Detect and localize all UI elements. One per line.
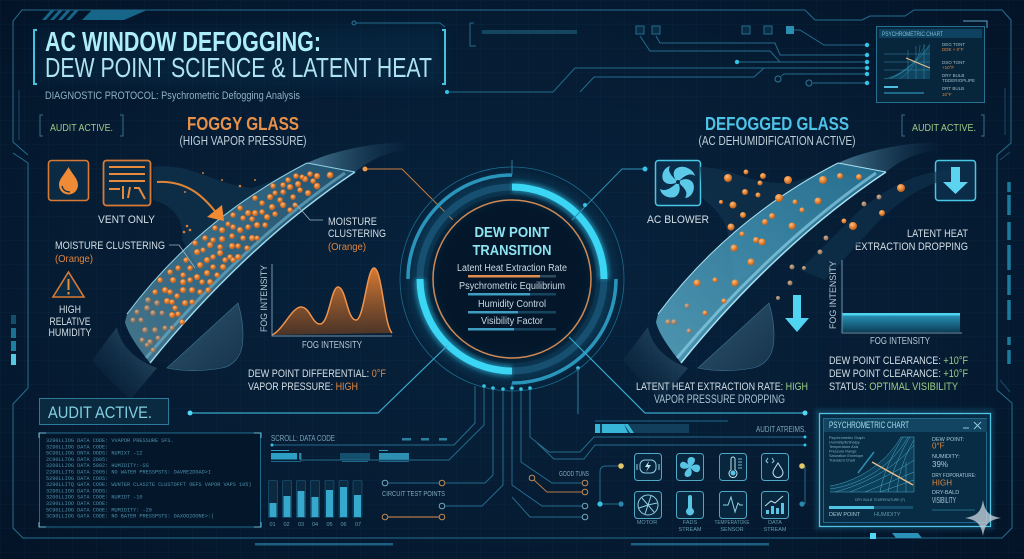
chart values: DRY-BALD — [932, 490, 959, 496]
readout: latent heat rate: VAPOR PRESSURE DROPPING — [654, 394, 785, 406]
mini psychrometric chart panel: DDE + 0°F — [942, 47, 964, 52]
icon: warning triangle — [53, 272, 84, 297]
chart caption lines: Psychrometric Graph — [829, 436, 865, 440]
readout: defogged values: STATUS: OPTIMAL VISIBILITY — [829, 381, 959, 393]
mini psychrometric chart panel: PSYCHROMETRIC CHART — [882, 31, 943, 38]
connector: hub to lower right — [569, 337, 808, 416]
scroll data code strip — [270, 386, 484, 462]
mini psychrometric chart panel: TDDERIOPLIPE — [942, 78, 975, 83]
metric: visibility factor — [468, 316, 556, 330]
mini psychrometric chart panel — [876, 26, 984, 102]
chart values: DRY FOPORATURE: — [932, 473, 976, 479]
data log terminal — [39, 433, 261, 527]
subtitle: DIAGNOSTIC PROTOCOL: Psychrometric Defogging Analysis — [45, 90, 300, 102]
data log terminal: 5C90LLJOG DNTA OODS: NUMIXT -12 — [46, 451, 143, 457]
icon: water drop — [48, 160, 88, 200]
central hub: dew point transition: DEW POINT — [474, 224, 550, 241]
car pillar and hood — [92, 142, 410, 400]
scroll data code strip: SCROLL: DATA CODE — [271, 434, 335, 443]
metric: visibility factor: Visibility Factor — [481, 316, 544, 327]
label: high relative humidity — [48, 304, 92, 339]
central hub: dew point transition: TRANSITION — [472, 242, 552, 259]
chart values — [932, 437, 976, 505]
data log terminal: 3290LLIOG DATA CODE: VVAPOR PRESSURE SFS. — [46, 438, 174, 444]
chart values: VISIBILITY — [932, 496, 956, 505]
icon: data stream — [762, 492, 788, 518]
window title: PSYCHROMETRIC CHART — [829, 420, 909, 430]
psychrometric chart window — [815, 409, 994, 530]
callout: moisture clustering right — [295, 203, 386, 253]
arrow: downward flow — [785, 295, 809, 332]
data log terminal: 3C90LLIOG GATA CODE: NO BATER PRESSPSTS: OAXOO2OONE>:( — [46, 514, 214, 520]
icon: droplets — [762, 454, 788, 480]
callout: moisture clustering left — [55, 240, 195, 268]
label: latent heat dropping: LATENT HEAT — [907, 228, 968, 240]
chart values: DEW POINT: — [932, 437, 965, 443]
icon grid — [634, 454, 788, 533]
bar chart: channels 01 to 07: 04 — [312, 522, 318, 528]
chart caption lines: Pressure Range — [829, 450, 856, 454]
data log terminal: 3200LLIOO SATA COOE: NURIDT -10 — [46, 495, 143, 501]
fog droplets — [152, 172, 333, 324]
remaining droplets — [694, 170, 905, 316]
sensor links — [597, 463, 805, 507]
callout: moisture clustering right: MOISTURE — [328, 216, 377, 228]
bar chart: channels 01 to 07: 03 — [298, 522, 304, 528]
chart values: 0°F — [932, 442, 945, 450]
data log terminal: 3290LLIOG DATA CODE: — [46, 444, 108, 450]
heading: foggy glass: (HIGH VAPOR PRESSURE) — [180, 134, 306, 148]
humidity slider: HUMIDITY — [874, 512, 901, 518]
callout: moisture clustering right: CLUSTERING — [328, 228, 386, 240]
icon: fan — [656, 160, 700, 206]
heading: defogged glass — [698, 114, 856, 148]
icon captions: SENSOR — [720, 527, 744, 533]
chart values: 39% — [932, 460, 948, 469]
metric: humidity control: Humidity Control — [478, 299, 546, 310]
icon captions — [637, 520, 787, 533]
icon: fan — [676, 454, 704, 480]
chart caption lines — [829, 436, 865, 462]
bar chart: channels 01 to 07: 06 — [340, 522, 347, 528]
star badge — [965, 500, 1001, 536]
label: high relative humidity: RELATIVE — [50, 316, 90, 328]
readout: foggy values — [248, 368, 386, 393]
icon: pulse — [720, 492, 746, 518]
label: high relative humidity: HUMIDITY — [48, 327, 92, 339]
audit streams bar: AUDIT ATREIMS. — [756, 424, 806, 434]
readout: latent heat rate — [636, 381, 808, 406]
chart caption lines: Saturation Envelope — [829, 454, 863, 458]
chart caption lines: Temperature Axis — [829, 445, 858, 449]
metric: latent heat extraction rate — [457, 263, 567, 278]
mini psychrometric chart panel: DSO TONT — [942, 60, 965, 65]
audit badge right — [902, 115, 984, 136]
callout: moisture clustering left: MOISTURE CLUSTERING — [55, 240, 165, 252]
data log terminal: 3290LLITQ GATA COOE: WUNTER CLAS2TE CLUSTOFFT OEFS VAPOR VAPS 105) — [46, 482, 251, 488]
data log terminal: 3200LLJOG DATA 5002: HUMIDITY:-SS — [46, 463, 149, 469]
mini psychrometric chart panel: +10°F — [942, 65, 954, 70]
bar chart: channels 01 to 07: 07 — [355, 522, 361, 528]
title: AC WINDOW DEFOGGING: — [45, 26, 321, 57]
readout: foggy values: DEW POINT DIFFERENTIAL: 0°F — [248, 368, 386, 380]
readout: latent heat rate: LATENT HEAT EXTRACTION RATE: HIGH — [636, 381, 808, 393]
chart caption lines: Transient Chart — [829, 458, 856, 462]
icon: motor turbine — [634, 492, 662, 518]
heading: defogged glass: DEFOGGED GLASS — [705, 114, 849, 134]
heading: foggy glass — [180, 114, 306, 148]
icon captions: STREAM — [764, 527, 787, 533]
chart: fog intensity high: FOG INTENSITY — [302, 340, 362, 351]
humidity slider — [829, 506, 975, 518]
icon captions: DATA — [768, 520, 782, 526]
airflow swoosh — [153, 166, 300, 270]
title: DEW POINT SCIENCE & LATENT HEAT — [45, 52, 432, 83]
bar chart: channels 01 to 07: 02 — [284, 522, 290, 528]
label: high relative humidity: HIGH — [59, 304, 81, 316]
chart values: NUMIDITY: — [932, 454, 960, 460]
readout: foggy values: VAPOR PRESSURE: HIGH — [248, 381, 358, 393]
label: ac blower: AC BLOWER — [647, 214, 709, 226]
metric: humidity control — [468, 299, 556, 314]
data log terminal: 2C90LL7OG DATA 2005: — [46, 457, 108, 463]
humidity slider: DEW POINT — [829, 512, 861, 518]
chart: fog intensity high — [259, 264, 392, 351]
chart: fog intensity low: FOG INTENSITY — [828, 260, 839, 329]
mini psychrometric chart panel: DRY BULB — [942, 73, 964, 78]
bar chart: channels 01 to 07: 01 — [270, 522, 276, 528]
circuit test points — [382, 388, 503, 520]
icon captions: TEMPERATOKE — [714, 520, 750, 526]
glass band — [125, 163, 355, 363]
icon: down arrow — [936, 160, 976, 200]
readout: defogged values: DEW POINT CLEARANCE: +10°F — [829, 355, 968, 367]
chart caption lines: Humidity/Enthalpy — [829, 440, 860, 444]
data log terminal: 5C90LLJOG DATA COOE: MUMIDITY: -20 — [46, 507, 152, 513]
data log terminal: 3290LLIOO DATA COOE: — [46, 501, 108, 507]
audit active banner: AUDIT ACTIVE. — [48, 403, 152, 422]
audit badge right: AUDIT ACTIVE. — [912, 122, 976, 134]
icon: motor bolt — [634, 454, 662, 480]
hub bus traces: GOOD TUNS — [559, 471, 589, 478]
icon captions: FADS — [683, 520, 698, 526]
audit active banner — [40, 398, 168, 424]
data log terminal: 5290LLIOG DATA COOS: — [46, 476, 108, 482]
chart values: HIGH — [932, 478, 952, 488]
audit streams bar — [595, 421, 806, 434]
chart: fog intensity low — [828, 260, 962, 347]
decorative top circuit traces — [352, 21, 869, 94]
label: latent heat dropping — [855, 228, 968, 253]
bar chart: channels 01 to 07 — [268, 480, 362, 528]
connector: orange to hub — [362, 166, 455, 222]
car pillar and hood — [623, 142, 941, 400]
audit badge left — [40, 115, 123, 136]
airflow swoosh — [700, 167, 860, 285]
callout: moisture clustering left: (Orange) — [55, 253, 93, 265]
connector: fan to hub — [572, 166, 648, 220]
heading: foggy glass: FOGGY GLASS — [187, 114, 299, 134]
callout: moisture clustering right: (Orange) — [328, 241, 366, 253]
chart: fog intensity high: FOG INTENSITY — [259, 264, 270, 332]
data log terminal: 3290LLIOG DATA DODS: — [46, 488, 108, 494]
readout: defogged values — [829, 355, 968, 393]
defogged windshield illustration — [623, 142, 950, 400]
bar chart: channels 01 to 07: 05 — [326, 522, 333, 528]
heading: defogged glass: (AC DEHUMIDIFICATION ACTIVE) — [698, 134, 856, 148]
mini psychrometric chart panel: DRT BULB — [942, 86, 964, 91]
mini psychrometric chart panel: DEG TONT — [942, 42, 965, 47]
audit badge left: AUDIT ACTIVE. — [50, 122, 113, 134]
mini psychrometric chart panel: 10°F — [942, 92, 952, 97]
metric: psychrometric equilibrium: Psychrometric Equilibrium — [459, 281, 565, 292]
label: vent only: VENT ONLY — [98, 214, 156, 226]
icon captions: STREAM — [679, 527, 702, 533]
data log terminal: 2290LLITG DATA 2005: NO WATER PRESSPSTS: OAVRE2DOAD>I — [46, 470, 211, 476]
foggy windshield illustration — [92, 142, 410, 400]
window controls — [963, 422, 981, 429]
readout: defogged values: DEW POINT CLEARANCE: +10°F — [829, 368, 968, 380]
icon: vent — [104, 160, 150, 206]
icon captions: MOTOR — [637, 520, 657, 526]
chart: fog intensity low: FOG INTENSITY — [870, 336, 930, 347]
glass band — [656, 163, 886, 363]
label: latent heat dropping: EXTRACTION DROPPING — [855, 241, 968, 253]
icon: gas thermometer — [676, 492, 704, 518]
circuit test points: CIRCUIT TEST POINTS — [382, 489, 445, 498]
arrow: airflow into glass — [157, 182, 224, 221]
stray droplets — [183, 172, 256, 233]
metric: latent heat extraction rate: Latent Heat Extraction Rate — [457, 263, 567, 274]
central hub: dew point transition — [400, 160, 624, 392]
title — [33, 26, 445, 86]
hub bus traces — [482, 368, 806, 520]
connector: audit to hub — [188, 346, 447, 416]
icon: thermometer — [720, 454, 746, 480]
psychrometric plot — [830, 437, 914, 502]
psychrometric plot: DRY BULB TEMPERATURE (F) — [855, 498, 905, 502]
